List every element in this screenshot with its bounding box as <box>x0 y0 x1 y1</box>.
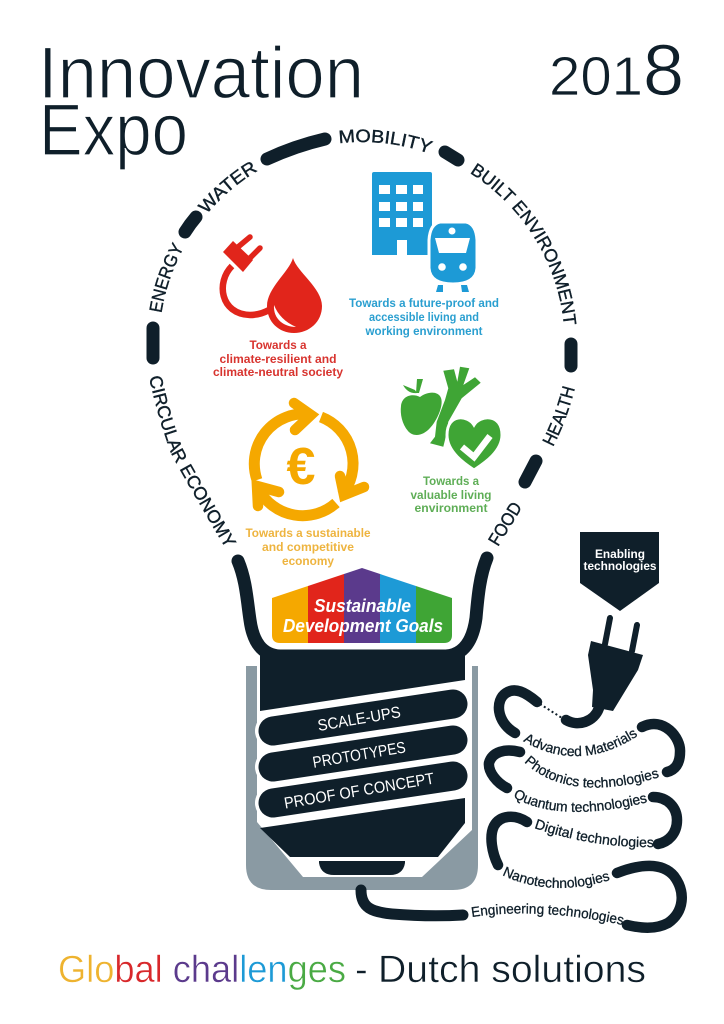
caption: sustainable economy <box>246 526 371 568</box>
stage label: scale-ups: SCALE-UPS <box>316 704 402 735</box>
cable from bulb base <box>361 890 463 916</box>
stage label: prototypes: PROTOTYPES <box>311 739 407 772</box>
sector labels around the bulb: BUILT ENVIRONMENT <box>470 163 576 324</box>
title: Innovation Expo: Expo <box>39 90 188 171</box>
icon: black plug <box>566 618 643 723</box>
technology labels: Digital technologies <box>534 819 654 850</box>
technology cord <box>489 690 682 928</box>
technology labels: Advanced Materials <box>522 730 637 756</box>
slogan: Global challenges - Dutch solutions: Dutch solutions <box>378 949 646 991</box>
slogan: Global challenges - Dutch solutions: Global challenges <box>58 949 346 991</box>
icon: euro in circular arrows: € <box>287 438 315 496</box>
sector labels around the bulb: WATER <box>197 162 258 212</box>
technology labels: Engineering technologies <box>472 903 624 925</box>
slogan: Global challenges - Dutch solutions <box>58 949 646 991</box>
enabling technologies arrow box: technologies <box>584 559 657 573</box>
caption: climate: climate-resilient and <box>220 352 336 366</box>
caption: living and working environment: Towards a future-proof and <box>349 296 499 310</box>
bulb screw base <box>246 655 478 890</box>
sector labels around the bulb: MOBILITY <box>340 129 434 152</box>
caption: climate: Towards a <box>250 338 307 352</box>
panel: Sustainable Development Goals house <box>272 565 452 645</box>
caption: living and working environment: accessible living and <box>369 310 479 324</box>
sector labels around the bulb <box>149 129 576 546</box>
sector labels around the bulb: FOOD <box>488 502 520 546</box>
technology labels <box>472 730 659 925</box>
caption: sustainable economy: economy <box>282 554 334 568</box>
caption: climate <box>213 338 343 379</box>
technology labels: Nanotechnologies <box>502 866 610 888</box>
technology labels: Photonics technologies <box>524 755 659 788</box>
icon: building and train <box>372 172 477 292</box>
icon: euro in circular arrows <box>254 403 364 516</box>
caption: sustainable economy: and competitive <box>262 540 354 554</box>
sector labels around the bulb: CIRCULAR ECONOMY <box>150 376 237 545</box>
sector labels around the bulb: HEALTH <box>542 386 575 446</box>
caption: valuable living environment: environment <box>414 501 488 515</box>
year 2018: 2018 <box>549 31 684 111</box>
icon: apple, leek and heart <box>401 367 502 470</box>
light bulb outline <box>153 139 571 656</box>
stage label: proof of concept: PROOF OF CONCEPT <box>283 770 436 813</box>
sector labels around the bulb: ENERGY <box>149 242 182 312</box>
caption: valuable living environment: valuable living <box>410 488 492 502</box>
caption: climate: climate-neutral society <box>213 365 343 379</box>
title: Innovation Expo: Innovation <box>38 33 364 114</box>
title: Innovation Expo <box>38 33 364 171</box>
panel: Sustainable Development Goals house: Development Goals <box>283 616 443 636</box>
caption: sustainable economy: Towards a sustainable <box>246 526 371 540</box>
icon: plug and water drop <box>223 237 322 333</box>
caption: valuable living environment: Towards a <box>423 474 479 488</box>
enabling technologies arrow box: Enabling <box>595 547 645 561</box>
caption: living and working environment: working environment <box>365 324 482 338</box>
slogan: Global challenges - Dutch solutions: - <box>355 949 368 991</box>
technology labels: Quantum technologies <box>514 790 647 812</box>
caption: valuable living environment <box>410 474 492 515</box>
caption: living and working environment <box>349 296 499 338</box>
enabling technologies arrow box <box>580 532 659 611</box>
panel: Sustainable Development Goals house: Sustainable <box>314 596 411 616</box>
